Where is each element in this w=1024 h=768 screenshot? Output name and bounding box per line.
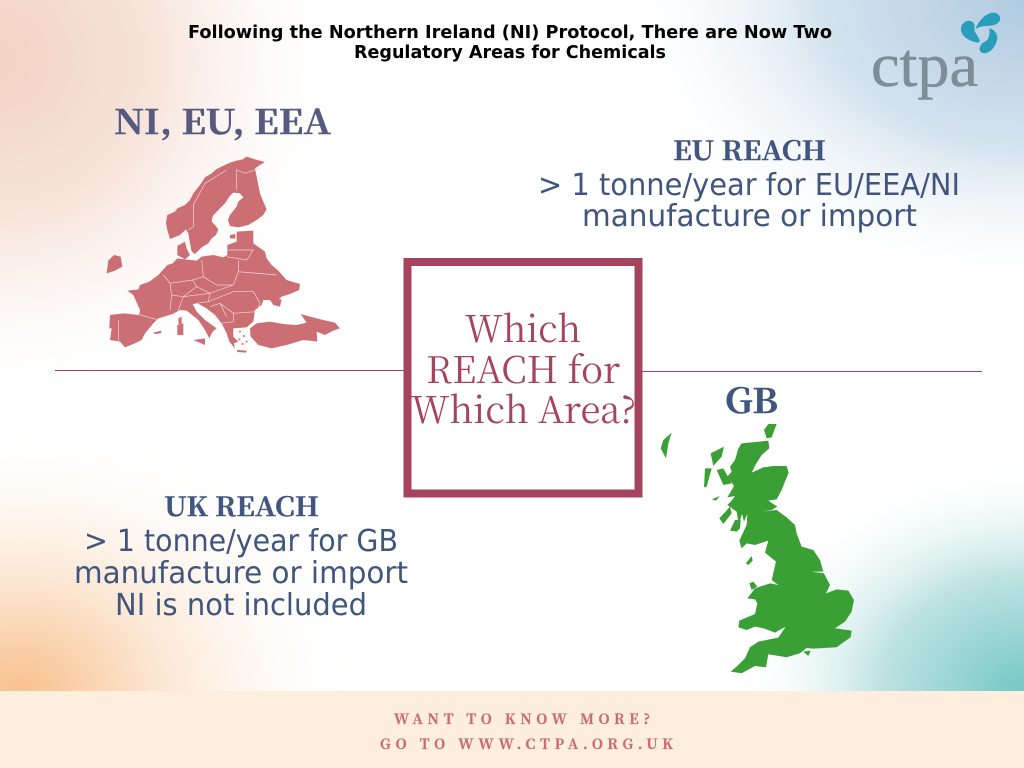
text: EU REACH	[538, 131, 960, 234]
divider right	[641, 371, 982, 372]
heading: NI, EU, EEA: NI, EU, EEA	[114, 95, 332, 144]
footer text: WANT TO KNOW MORE?	[394, 709, 650, 729]
footer text: GO TO WWW.CTPA.ORG.UK	[380, 734, 673, 754]
central box text: Which Area?	[411, 380, 636, 434]
text: UK REACH: > 1 tonne/year for GB	[84, 524, 398, 559]
title: Regulatory Areas for Chemicals	[354, 42, 666, 63]
title: Following the Northern Ireland (NI) Protocol, There are Now Two	[188, 22, 832, 43]
divider left	[55, 370, 405, 371]
text: EU REACH: > 1 tonne/year for EU/EEA/NI	[538, 168, 960, 203]
footer band	[0, 691, 1024, 768]
logo: ctpa	[871, 13, 1000, 100]
text: UK REACH: manufacture or import	[74, 556, 408, 591]
map: Europe	[107, 157, 340, 353]
map: Great Britain	[661, 424, 854, 673]
text: UK REACH: NI is not included	[115, 588, 367, 623]
text: EU REACH: EU REACH	[673, 131, 826, 168]
text: EU REACH: manufacture or import	[582, 199, 917, 234]
icon: ctpa swirl	[961, 13, 1000, 53]
central box text: REACH for	[426, 340, 620, 394]
text: UK REACH: UK REACH	[164, 487, 319, 524]
central box text: Which	[465, 299, 581, 353]
logo wordmark: ctpa	[871, 32, 978, 100]
heading: GB: GB	[725, 374, 778, 423]
text: UK REACH	[74, 487, 408, 623]
footer text	[380, 709, 673, 754]
central box text	[411, 299, 636, 434]
title	[188, 22, 832, 63]
central box	[408, 262, 638, 494]
